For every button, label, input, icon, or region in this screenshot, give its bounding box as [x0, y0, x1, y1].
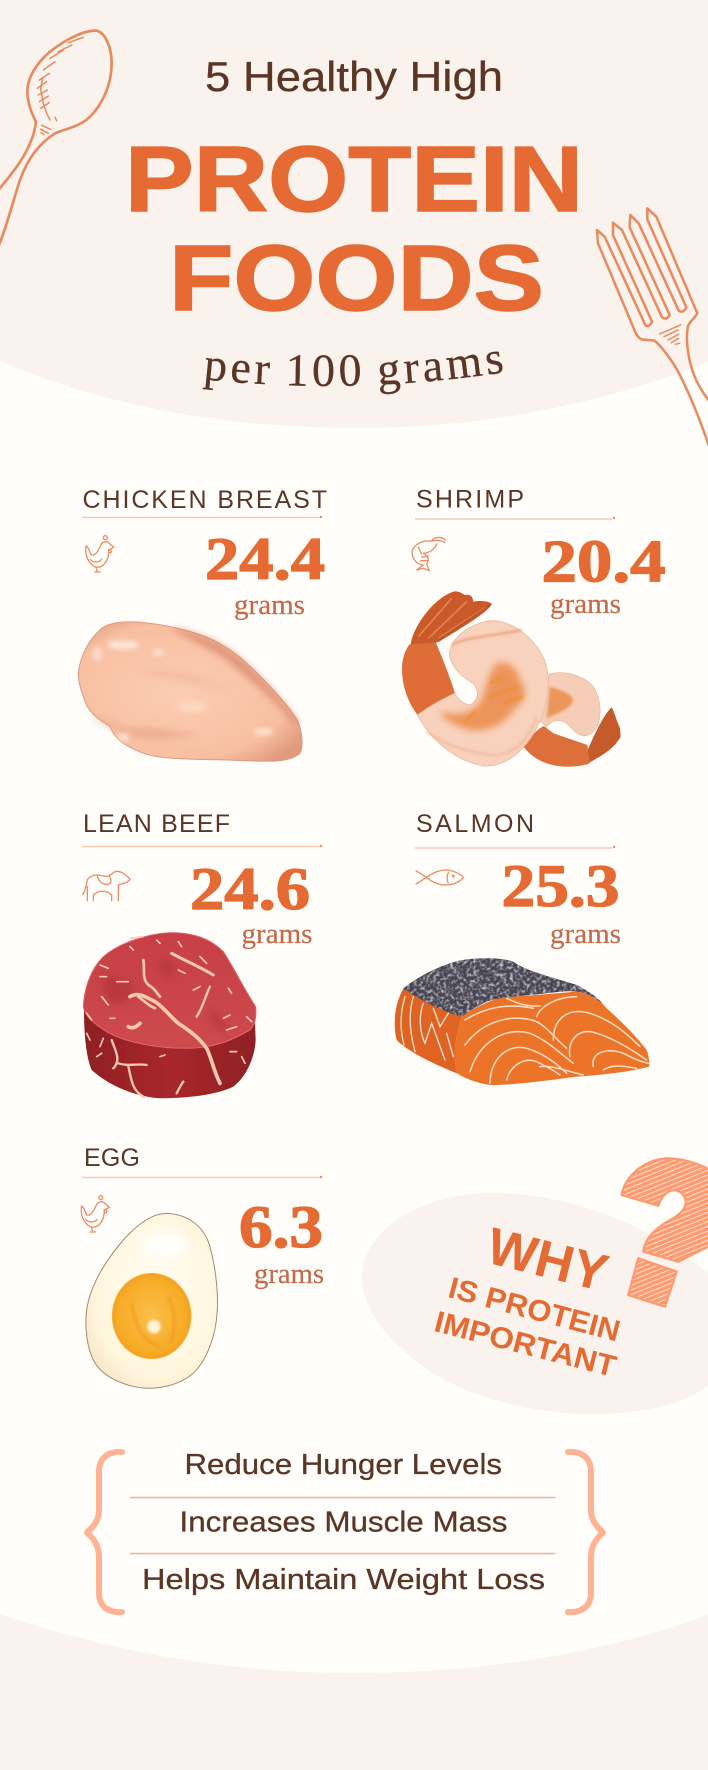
number: 20.4: 20.4 — [542, 528, 666, 594]
text: helps maintain weight loss: Helps Maintain Weight Loss — [142, 1564, 545, 1596]
heading: egg: EGG — [84, 1144, 140, 1172]
title: PROTEIN: PROTEIN — [125, 127, 583, 231]
icon: hen — [86, 536, 114, 572]
panel: header background — [0, 0, 708, 428]
illustration: salmon — [395, 957, 649, 1085]
panel: why is protein important — [362, 1158, 708, 1414]
icon: fork — [597, 208, 708, 448]
heading: lean beef: LEAN BEEF — [83, 810, 230, 838]
icon: cow — [83, 871, 130, 901]
heading: important: IMPORTANT — [431, 1306, 619, 1384]
icon: question mark — [622, 1158, 708, 1307]
heading: chicken breast: CHICKEN BREAST — [82, 486, 327, 514]
subtitle: per 100 grams: per 100 grams — [202, 352, 503, 394]
panel: chicken breast — [78, 486, 327, 761]
number: 6.3: 6.3 — [239, 1194, 323, 1260]
blob background — [362, 1193, 708, 1414]
unit: grams: grams — [234, 590, 305, 621]
illustration: boiled egg — [86, 1213, 217, 1388]
icon: left brace — [87, 1452, 122, 1612]
title: 5 Healthy High: 5 Healthy High — [205, 53, 503, 100]
panel: benefits list — [87, 1449, 603, 1612]
heading: salmon: SALMON — [416, 810, 534, 838]
subtitle: per 100 grams — [202, 352, 503, 394]
panel: egg — [81, 1144, 324, 1388]
panel: shrimp — [402, 486, 666, 767]
unit: grams: grams — [242, 919, 312, 950]
text: increases muscle mass: Increases Muscle Mass — [180, 1506, 508, 1538]
illustration: chicken breast — [78, 622, 302, 761]
heading: is protein: IS PROTEIN — [445, 1272, 624, 1348]
icon: spoon — [0, 31, 112, 245]
illustration: shrimp — [402, 591, 621, 767]
title: FOODS: FOODS — [169, 226, 544, 330]
panel: footer background — [0, 1614, 708, 1770]
icon: shrimp — [412, 537, 446, 571]
number: 25.3: 25.3 — [502, 853, 620, 919]
icon: hen — [81, 1196, 109, 1232]
panel: salmon — [395, 810, 649, 1085]
text: reduce hunger levels: Reduce Hunger Levels — [184, 1449, 502, 1481]
unit: grams: grams — [254, 1259, 324, 1290]
icon: fish — [416, 870, 463, 885]
icon: right brace — [568, 1452, 603, 1612]
unit: grams: grams — [550, 589, 621, 620]
number: 24.4: 24.4 — [205, 526, 325, 592]
heading: shrimp: SHRIMP — [416, 486, 524, 514]
illustration: lean beef — [83, 933, 256, 1098]
unit: grams: grams — [550, 919, 621, 950]
panel: lean beef — [82, 810, 322, 1098]
number: 24.6: 24.6 — [190, 856, 310, 922]
heading: why: WHY — [481, 1217, 614, 1303]
